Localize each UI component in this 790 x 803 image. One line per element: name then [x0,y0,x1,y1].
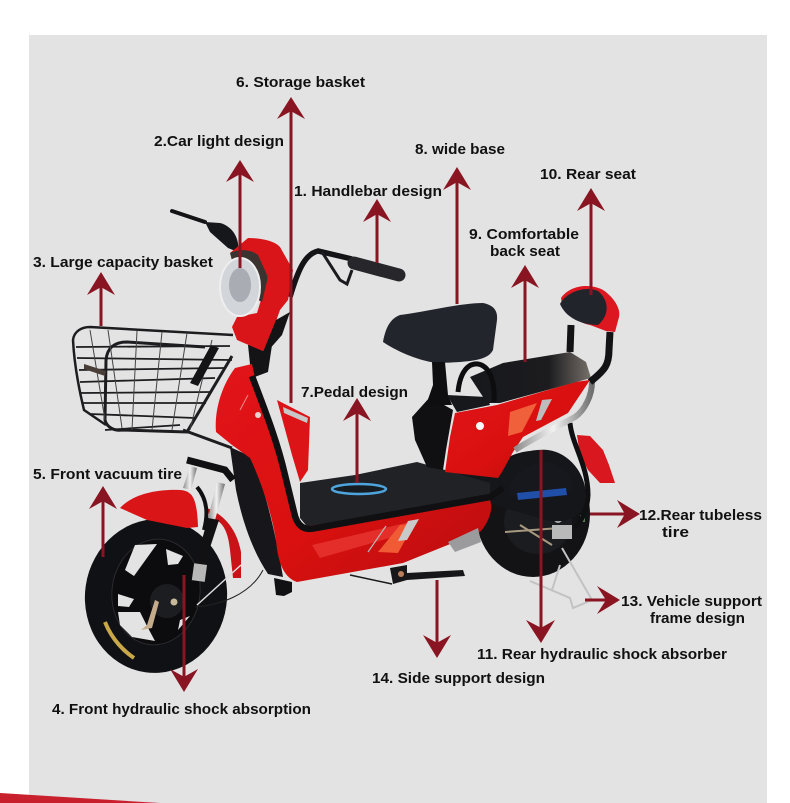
label 2: 2.Car light design [154,133,284,150]
handlebar left stub [172,211,205,222]
steering neck [248,345,272,378]
electric scooter illustration [73,211,619,682]
storage pouch [277,400,310,482]
basket front rod [183,430,232,448]
basket mount [190,345,219,386]
headlight [220,258,260,316]
basket front frame [105,342,232,432]
basket vertical wires [90,330,212,430]
rear chassis and wheel arch [427,450,586,521]
backrest [560,286,619,332]
saddle hoop [458,364,494,402]
scooter head shell [230,238,293,352]
label 12 second line: tire [662,524,689,541]
label 9: 9. Comfortable [469,226,579,243]
label 7: 7.Pedal design [301,384,408,401]
right lever [322,252,352,284]
arrow: 1 handlebar [363,199,391,263]
rear wheel arch opening [510,462,572,496]
label 4: 4. Front hydraulic shock absorption [52,701,311,718]
floorboard [300,462,490,530]
arrow: 12 rear tire [590,500,640,528]
basket horizontal wires [76,346,232,430]
label 14: 14. Side support design [372,670,545,687]
label 11: 11. Rear hydraulic shock absorber [477,646,727,663]
basket back frame [73,327,233,425]
underside chrome [448,528,481,552]
saddle post [426,362,452,405]
arrow: 13 support frame [585,586,620,614]
arrow: 6 storage basket [277,97,305,403]
kickstand [350,565,465,584]
label 8: 8. wide base [415,141,505,158]
label 13 second line: frame design [650,610,745,627]
arrow: 10 rear seat [577,188,605,295]
black trim strip [252,376,503,529]
pouch top chrome [283,407,308,423]
basket tag [84,364,106,376]
label 1: 1. Handlebar design [294,183,442,200]
label 5: 5. Front vacuum tire [33,466,182,483]
rear fender [577,435,615,483]
main saddle [383,303,497,363]
main red body [216,364,491,582]
arrow: 7 pedal [343,398,371,483]
dark leg shield [230,447,283,577]
basket [73,327,233,448]
rear seat [470,352,591,403]
blue floor emblem [332,484,386,494]
front fork [183,460,263,607]
rear red body [445,380,590,478]
headlight lens detail [229,268,251,302]
label 12: 12.Rear tubeless [639,507,762,524]
left brake control [205,222,238,252]
under-body foot mount [274,578,292,596]
head lower black [263,312,290,352]
label 13: 13. Vehicle support [621,593,762,610]
head shell inner dark [230,250,268,302]
rear wheel [476,451,590,577]
blue rear light strip [517,488,567,500]
arrow: 2 car light [226,160,254,268]
centre stand [530,548,592,608]
arrow: 8 wide base [443,167,471,304]
right grip [354,263,399,275]
lower seat section [447,395,490,412]
arrow: 4 front shock [170,575,198,692]
rear support arm [570,423,588,527]
side panel highlight and decals [240,395,419,558]
arrow: 3 basket [87,272,115,326]
arrow: 14 side support [423,580,451,658]
red corner wedge [0,793,160,803]
front wheel [75,510,237,682]
right handlebar [290,251,352,297]
rear body decals [476,399,552,436]
rear black motor housing [412,397,453,470]
tire label [105,622,134,658]
wheel openings [125,544,157,576]
label 9 second line: back seat [490,243,560,260]
label 3: 3. Large capacity basket [33,254,213,271]
arrow: 9 back seat [511,265,539,362]
arrow: 5 front tire [89,486,117,557]
arrow: 11 rear shock [526,450,555,643]
front fender rear skirt [207,508,241,578]
front fender [120,490,198,528]
label 10: 10. Rear seat [540,166,636,183]
rear chrome trim [515,382,592,450]
label 6: 6. Storage basket [236,74,365,91]
backrest support [570,325,610,382]
